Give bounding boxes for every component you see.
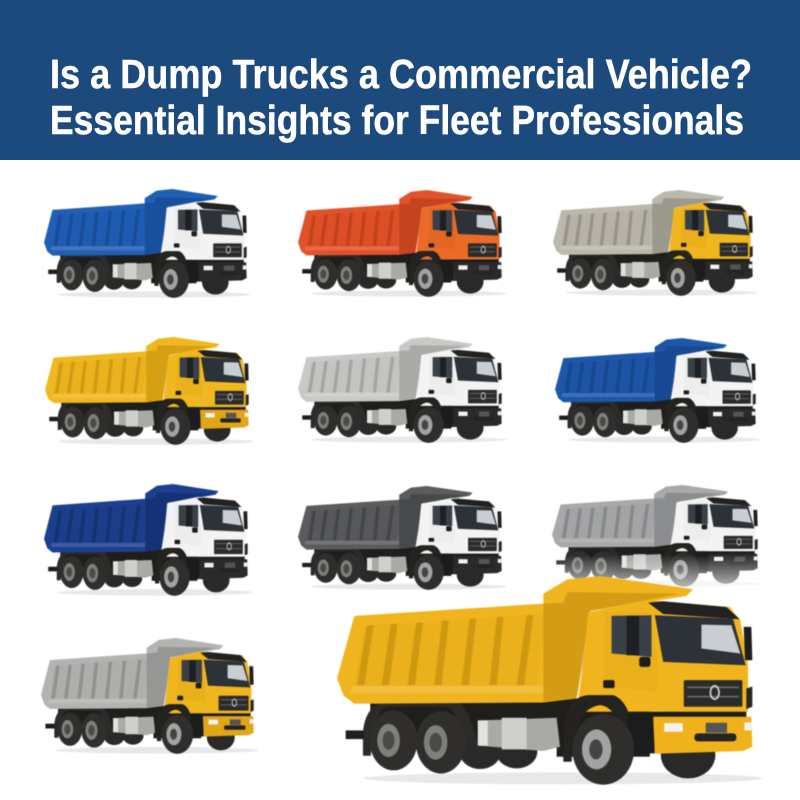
truck: blue dump body, white cab	[44, 189, 252, 298]
truck: grey body, yellow cab	[553, 190, 758, 296]
truck: yellow	[45, 337, 254, 445]
truck: blue body, white cab	[555, 338, 761, 443]
truck: orange	[298, 190, 507, 297]
header banner	[0, 0, 800, 160]
truck: dark grey body, white cab	[298, 486, 507, 590]
truck: navy body, white cab	[44, 484, 253, 596]
truck: silver body, white cab, faded wheels	[545, 485, 765, 591]
title	[50, 51, 752, 143]
truck: light grey body, white cab	[298, 337, 507, 443]
truck: grey body, yellow cab, lower left	[41, 638, 259, 754]
truck: large yellow foreground	[337, 576, 763, 785]
